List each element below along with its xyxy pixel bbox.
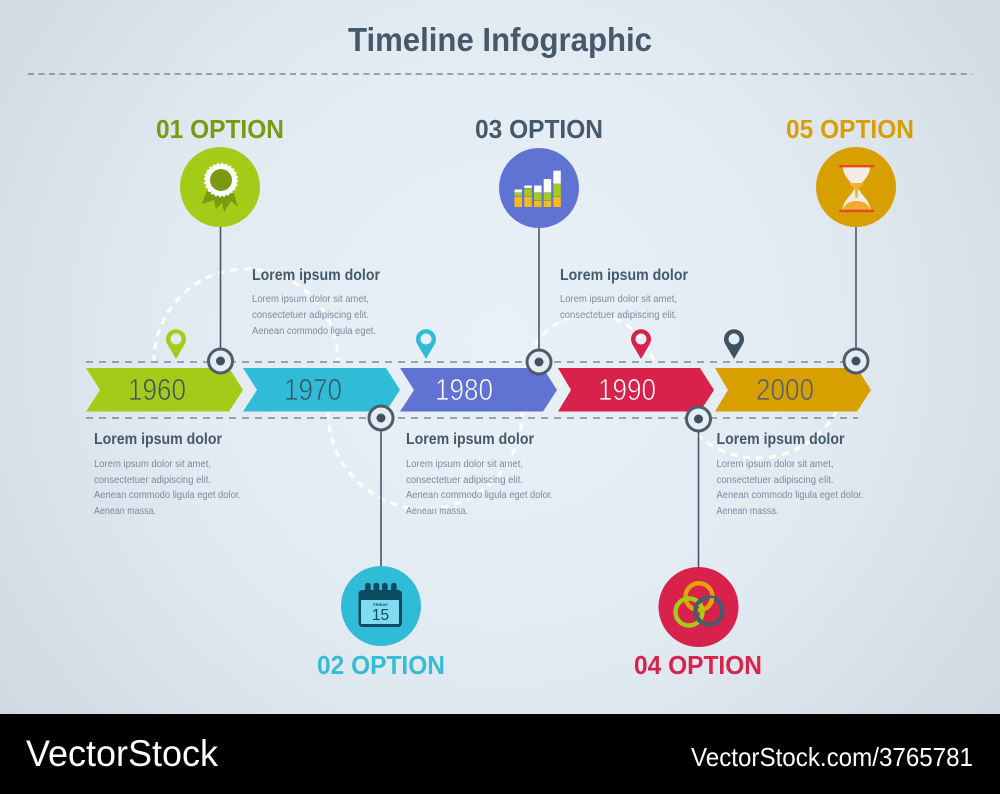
option 05: 05 OPTION bbox=[786, 116, 914, 144]
text block: bottom 1: Aenean commodo ligula eget dolor. bbox=[94, 489, 241, 501]
text block: bottom 1: Aenean massa. bbox=[94, 505, 156, 517]
text block: bottom 3: Aenean massa. bbox=[716, 505, 778, 517]
text block: bottom 2 bbox=[406, 431, 553, 517]
text block: bottom 3 bbox=[716, 431, 864, 517]
icon: award rosette bbox=[202, 164, 238, 212]
arrow 2000 bbox=[715, 368, 871, 412]
icon: calendar: FRIDAY bbox=[373, 602, 388, 607]
icon: green pin bbox=[166, 329, 186, 359]
icon: hourglass bbox=[839, 165, 874, 212]
arrow 1990: 1990 bbox=[598, 372, 656, 407]
text block: bottom 2: consectetuer adipiscing elit. bbox=[406, 474, 523, 486]
text block: bottom 2: Aenean massa. bbox=[406, 505, 468, 517]
option 02 bbox=[317, 406, 445, 680]
arrow 1970: 1970 bbox=[284, 372, 342, 407]
text block: top right: consectetuer adipiscing elit. bbox=[560, 309, 677, 321]
arrow 1960 bbox=[86, 368, 243, 412]
option 04: 04 OPTION bbox=[634, 652, 762, 680]
option 03: 03 OPTION bbox=[475, 116, 603, 144]
text block: top right: Lorem ipsum dolor bbox=[560, 267, 688, 284]
text block: top right bbox=[560, 267, 688, 321]
text block: bottom 1: Lorem ipsum dolor bbox=[94, 431, 222, 448]
icon: calendar: 15 bbox=[372, 607, 389, 624]
arrow 1990 bbox=[558, 368, 714, 412]
icon: dark pin bbox=[724, 329, 744, 359]
arrow 1980 bbox=[400, 368, 557, 412]
text block: bottom 3: Aenean commodo ligula eget dolor. bbox=[716, 489, 864, 501]
icon: stacked bars bbox=[514, 171, 561, 207]
text block: top right: Lorem ipsum dolor sit amet, bbox=[560, 293, 677, 305]
option 04 bbox=[634, 407, 762, 680]
option 02: 02 OPTION bbox=[317, 652, 445, 680]
text block: bottom 1 bbox=[94, 431, 241, 517]
icon: calendar bbox=[358, 583, 402, 627]
icon: linked rings bbox=[676, 583, 722, 626]
text block: bottom 3: Lorem ipsum dolor sit amet, bbox=[716, 458, 834, 470]
text block: bottom 1: consectetuer adipiscing elit. bbox=[94, 474, 211, 486]
text block: bottom 2: Aenean commodo ligula eget dolor. bbox=[406, 489, 553, 501]
text block: bottom 3: Lorem ipsum dolor bbox=[716, 431, 844, 448]
text block: top left: Aenean commodo ligula eget. bbox=[252, 325, 376, 337]
arrow 2000: 2000 bbox=[756, 372, 814, 407]
timeline arrows bbox=[86, 368, 871, 412]
footer band bbox=[0, 714, 1000, 794]
option 05 bbox=[786, 116, 914, 373]
icon: cyan pin bbox=[416, 329, 436, 359]
option 01 bbox=[156, 116, 284, 373]
arrow 1980: 1980 bbox=[435, 372, 493, 407]
text block: bottom 2: Lorem ipsum dolor sit amet, bbox=[406, 458, 523, 470]
title: Timeline Infographic bbox=[348, 21, 652, 58]
text block: top left: consectetuer adipiscing elit. bbox=[252, 309, 369, 321]
text block: top left: Lorem ipsum dolor sit amet, bbox=[252, 293, 369, 305]
text block: top left bbox=[252, 267, 380, 337]
text block: top left: Lorem ipsum dolor bbox=[252, 267, 380, 284]
text block: bottom 2: Lorem ipsum dolor bbox=[406, 431, 534, 448]
text block: bottom 1: Lorem ipsum dolor sit amet, bbox=[94, 458, 211, 470]
arrow 1960: 1960 bbox=[128, 372, 186, 407]
text block: bottom 3: consectetuer adipiscing elit. bbox=[716, 474, 834, 486]
option 01: 01 OPTION bbox=[156, 116, 284, 144]
dashed wave path bbox=[154, 269, 836, 509]
footer band: VectorStock bbox=[26, 733, 218, 774]
option 03 bbox=[475, 116, 603, 374]
footer band: VectorStock.com/3765781 bbox=[691, 742, 973, 772]
arrow 1970 bbox=[243, 368, 400, 412]
icon: red pin bbox=[631, 329, 651, 359]
